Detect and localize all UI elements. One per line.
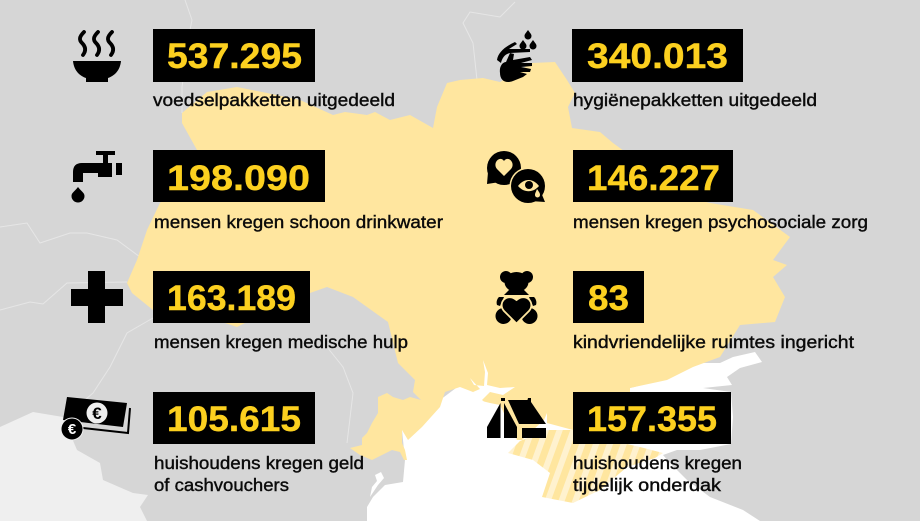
number: 83 — [588, 279, 629, 318]
icon: soup bowl — [73, 32, 121, 82]
stat: temporary shelter — [487, 392, 742, 495]
label second line: of cashvouchers — [154, 475, 289, 495]
label: hygiënepakketten uitgedeeld — [573, 90, 817, 110]
map: sea — [367, 352, 762, 521]
stat: cash — [61, 392, 364, 495]
stat: medical help — [71, 271, 408, 352]
label: mensen kregen psychosociale zorg — [573, 212, 868, 232]
number box — [573, 271, 644, 323]
icon: banknotes and euro coins: € — [68, 421, 77, 438]
number: 146.227 — [587, 159, 720, 198]
label: huishoudens kregen geld — [154, 453, 364, 473]
number box — [153, 271, 310, 323]
stat: hygiene parcels — [497, 29, 817, 110]
icon: speech bubbles with heart and eye — [487, 151, 546, 204]
number: 157.355 — [587, 400, 717, 439]
icon: teddy bear with heart — [496, 271, 538, 324]
label: mensen kregen medische hulp — [154, 332, 408, 352]
number: 340.013 — [587, 37, 728, 76]
map: Ukraine — [127, 62, 790, 460]
number box — [153, 29, 315, 82]
stat: drinking water — [72, 150, 443, 232]
map: Dnipro estuary — [470, 360, 515, 404]
number box — [153, 392, 315, 444]
number: 163.189 — [167, 279, 296, 318]
label: mensen kregen schoon drinkwater — [154, 212, 443, 232]
number box — [573, 392, 731, 444]
stat: food parcels — [73, 29, 395, 110]
map: lake in delta — [370, 472, 384, 497]
icon: washing hands — [497, 30, 536, 82]
number box — [573, 150, 733, 202]
number box — [153, 150, 325, 202]
label: kindvriendelijke ruimtes ingericht — [573, 332, 854, 352]
label second line: tijdelijk onderdak — [573, 475, 721, 495]
number: 105.615 — [167, 400, 301, 439]
icon: banknotes and euro coins: € — [92, 404, 102, 423]
number box — [572, 29, 743, 82]
number: 198.090 — [167, 159, 310, 198]
map: neighbouring borders — [0, 0, 515, 443]
label: huishoudens kregen — [573, 453, 742, 473]
label: voedselpakketten uitgedeeld — [153, 90, 395, 110]
icon: tent — [487, 398, 546, 438]
stat: psychosocial care — [487, 150, 868, 232]
icon: banknotes and euro coins — [61, 397, 130, 440]
number: 537.295 — [167, 37, 302, 76]
map: light southern region — [0, 412, 148, 521]
stat: child-friendly spaces — [496, 271, 854, 352]
icon: tap — [72, 151, 122, 202]
map: Crimea hatched — [508, 430, 663, 503]
icon: medical cross — [71, 271, 123, 323]
